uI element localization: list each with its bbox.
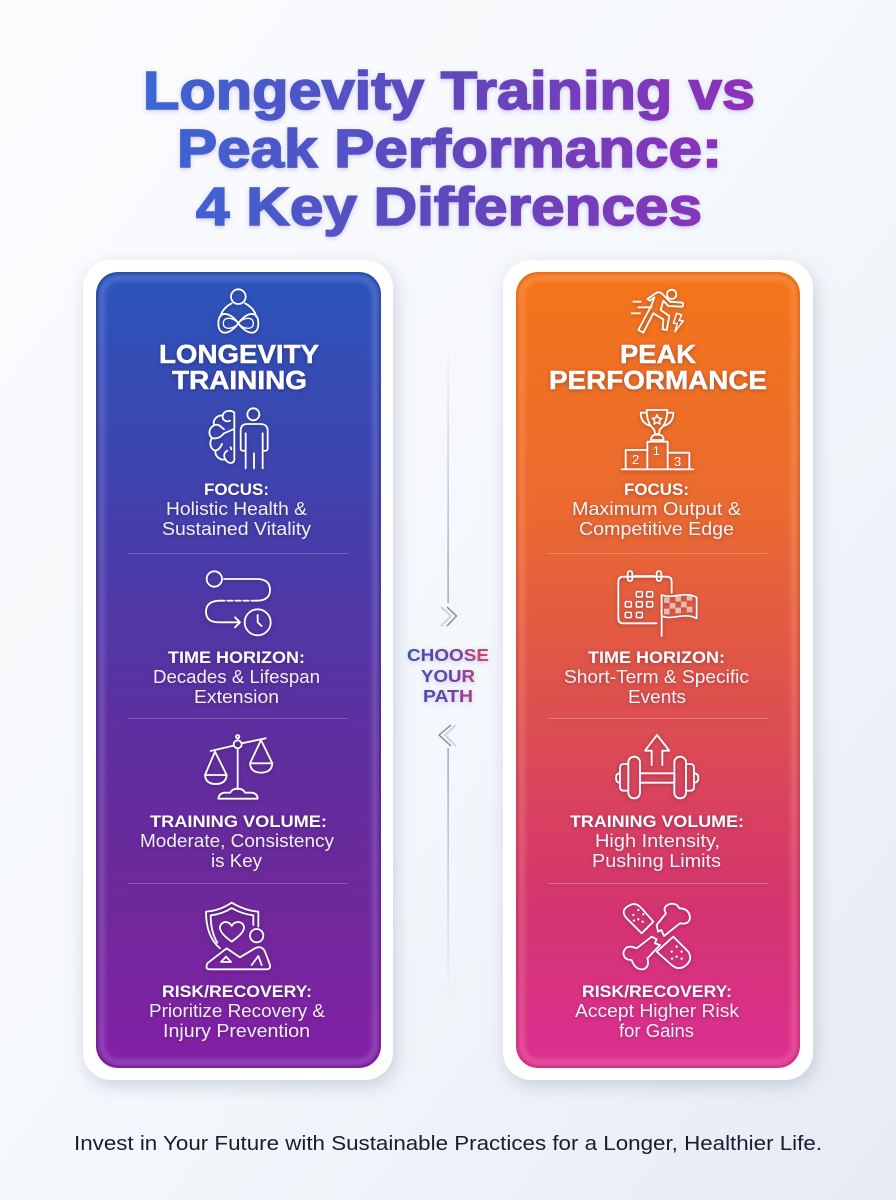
icon: sprinter with lightning bbox=[632, 290, 683, 333]
icon: calendar and checkered flag bbox=[618, 571, 697, 636]
text: time horizon: TIME HORIZON: bbox=[168, 648, 305, 667]
title: Longevity Training vs bbox=[143, 61, 755, 121]
heading bbox=[549, 339, 767, 395]
icon: dumbbell with up arrow bbox=[616, 735, 698, 798]
panel content bbox=[128, 289, 348, 1041]
text: training volume: Moderate, Consistency bbox=[140, 831, 334, 851]
label: choose your path: PATH bbox=[423, 686, 473, 706]
panel: peak performance bbox=[503, 260, 813, 1080]
text: risk/recovery: RISK/RECOVERY: bbox=[582, 982, 732, 1001]
inner edge glow bbox=[517, 273, 799, 1067]
title: Peak Performance: bbox=[177, 119, 722, 179]
panel fill bbox=[96, 272, 381, 1068]
text: training volume bbox=[140, 812, 334, 871]
text: training volume: Pushing Limits bbox=[592, 851, 721, 871]
text: focus: FOCUS: bbox=[204, 480, 269, 499]
text: risk/recovery: RISK/RECOVERY: bbox=[162, 982, 312, 1001]
heading bbox=[159, 339, 319, 395]
text: time horizon bbox=[564, 648, 749, 707]
label: choose your path bbox=[407, 645, 489, 706]
icon: bandages and broken bone bbox=[623, 904, 690, 969]
panel fill bbox=[516, 272, 800, 1068]
text: time horizon: Events bbox=[628, 687, 686, 707]
text: time horizon: Extension bbox=[194, 687, 279, 707]
card frame bbox=[83, 260, 393, 1080]
text: risk/recovery: Prioritize Recovery & bbox=[149, 1001, 325, 1021]
text: focus: Sustained Vitality bbox=[162, 519, 311, 539]
icon: timeline with clock bbox=[206, 571, 271, 635]
text: training volume: TRAINING VOLUME: bbox=[150, 812, 327, 831]
text: risk/recovery bbox=[575, 982, 740, 1041]
heading: LONGEVITY bbox=[159, 339, 319, 369]
text: risk/recovery: for Gains bbox=[619, 1021, 694, 1041]
heading: TRAINING bbox=[172, 365, 307, 395]
text: time horizon: TIME HORIZON: bbox=[588, 648, 725, 667]
text: training volume: TRAINING VOLUME: bbox=[570, 812, 744, 831]
text: focus bbox=[162, 480, 311, 539]
label: choose your path: CHOOSE bbox=[407, 645, 489, 665]
label: choose your path: YOUR bbox=[421, 666, 475, 686]
text: risk/recovery: Accept Higher Risk bbox=[575, 1001, 740, 1021]
panel content bbox=[548, 290, 768, 1041]
text: time horizon: Short-Term & Specific bbox=[564, 667, 749, 687]
podium numbers: 2 bbox=[632, 452, 639, 467]
text: training volume: is Key bbox=[211, 851, 262, 871]
text: focus: Holistic Health & bbox=[166, 499, 307, 519]
podium numbers bbox=[632, 444, 681, 469]
icon: brain and body bbox=[209, 408, 268, 468]
podium numbers: 3 bbox=[674, 454, 681, 469]
text: focus bbox=[572, 480, 741, 539]
title bbox=[143, 61, 755, 237]
arrow: right chevrons bbox=[441, 607, 456, 626]
icon: balance scales bbox=[205, 735, 272, 799]
center connector bbox=[407, 335, 489, 1003]
icon: shield with heart and resting person bbox=[206, 903, 270, 969]
inner edge glow bbox=[97, 273, 380, 1067]
text: focus: Maximum Output & bbox=[572, 499, 741, 519]
card frame bbox=[503, 260, 813, 1080]
icon: meditation with infinity bbox=[218, 289, 258, 333]
text: time horizon bbox=[153, 648, 320, 707]
text: time horizon: Decades & Lifespan bbox=[153, 667, 320, 687]
podium numbers: 1 bbox=[653, 444, 660, 458]
text: focus: Competitive Edge bbox=[579, 519, 734, 539]
text: risk/recovery bbox=[149, 982, 325, 1041]
heading: PERFORMANCE bbox=[549, 365, 767, 395]
heading: PEAK bbox=[620, 339, 696, 369]
footer tagline: Invest in Your Future with Sustainable Practices for a Longer, Healthier Life. bbox=[74, 1133, 822, 1155]
panel: longevity training bbox=[83, 260, 393, 1080]
text: training volume bbox=[570, 812, 744, 871]
text: focus: FOCUS: bbox=[624, 480, 689, 499]
text: training volume: High Intensity, bbox=[595, 831, 720, 851]
icon: trophy on podium bbox=[622, 410, 693, 469]
arrow: left chevrons bbox=[439, 725, 456, 746]
text: risk/recovery: Injury Prevention bbox=[163, 1021, 310, 1041]
title: 4 Key Differences bbox=[196, 177, 702, 237]
